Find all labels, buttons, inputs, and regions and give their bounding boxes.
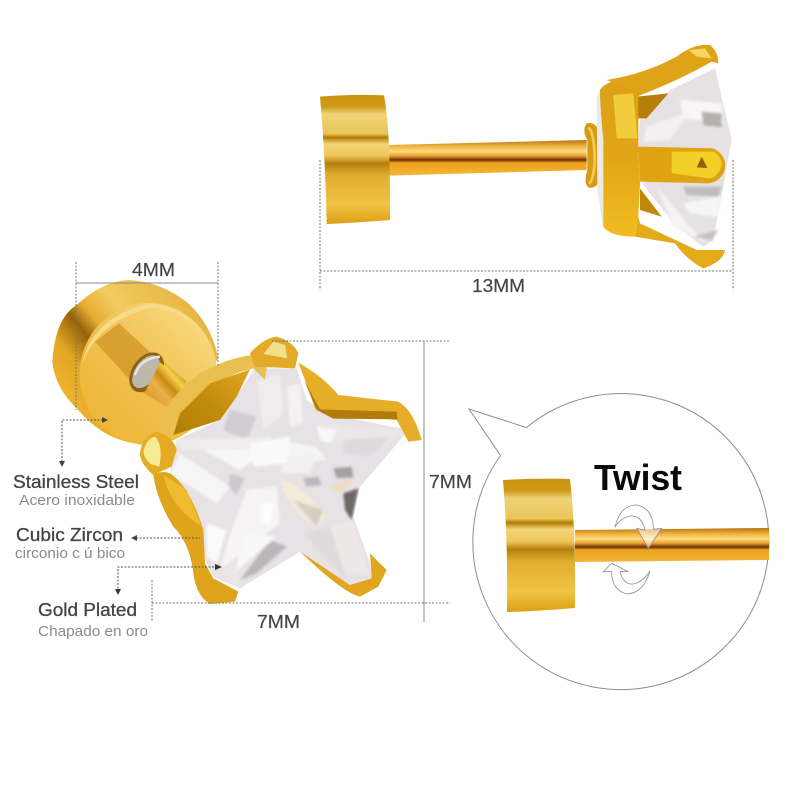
- left band: [157, 355, 267, 435]
- 4MM dimension: 4MM: [132, 260, 175, 280]
- 4MM dimension: [76, 260, 218, 410]
- gem: [170, 368, 408, 588]
- left leaf: [173, 369, 250, 435]
- label: stainless steel: Acero inoxidable: [19, 492, 135, 509]
- label: gold plated: Gold Plated: [38, 600, 137, 620]
- label: gold plated: Chapado en oro: [38, 623, 148, 640]
- lower-right prong: [300, 552, 387, 597]
- label: cubic zircon: [15, 525, 200, 562]
- label: gold plated: [38, 564, 222, 640]
- screw post and back: [320, 95, 602, 224]
- top prong: [250, 337, 298, 368]
- 7MM height dimension: 7MM: [429, 472, 472, 492]
- label: stainless steel: Stainless Steel: [13, 472, 139, 492]
- twist callout bubble: [469, 394, 769, 690]
- 13MM dimension: 13MM: [472, 276, 525, 296]
- threaded stem: [142, 360, 187, 408]
- top earring side view: [320, 45, 732, 268]
- heading: Twist: [594, 457, 682, 498]
- post: [575, 528, 769, 562]
- lower prong: [635, 217, 725, 268]
- upper prong: [607, 45, 718, 97]
- stone head: [597, 45, 732, 268]
- screw back disc: [52, 280, 218, 445]
- lower-left band: [153, 472, 238, 604]
- center prong: [638, 147, 725, 183]
- stem band reflection: [95, 323, 155, 382]
- arrow: rotate up: [603, 563, 650, 594]
- 7MM width dimension: 7MM: [257, 612, 300, 632]
- 7MM width dimension: [152, 580, 450, 632]
- star earring front view: [52, 280, 422, 604]
- right band: [298, 363, 422, 442]
- bubble outline: [469, 394, 769, 690]
- base: [600, 77, 640, 237]
- stone window shadows: [637, 93, 668, 118]
- rotation arrows: [603, 505, 662, 594]
- label: stainless steel: [13, 417, 139, 509]
- arrow: rotate down: [615, 505, 662, 548]
- label: cubic zircon: circonio c ú bico: [15, 545, 125, 562]
- screw back: [503, 479, 575, 612]
- star head: [140, 337, 422, 604]
- label: cubic zircon: Cubic Zircon: [16, 525, 123, 545]
- 13MM dimension: [320, 160, 733, 296]
- left prong: [140, 432, 177, 475]
